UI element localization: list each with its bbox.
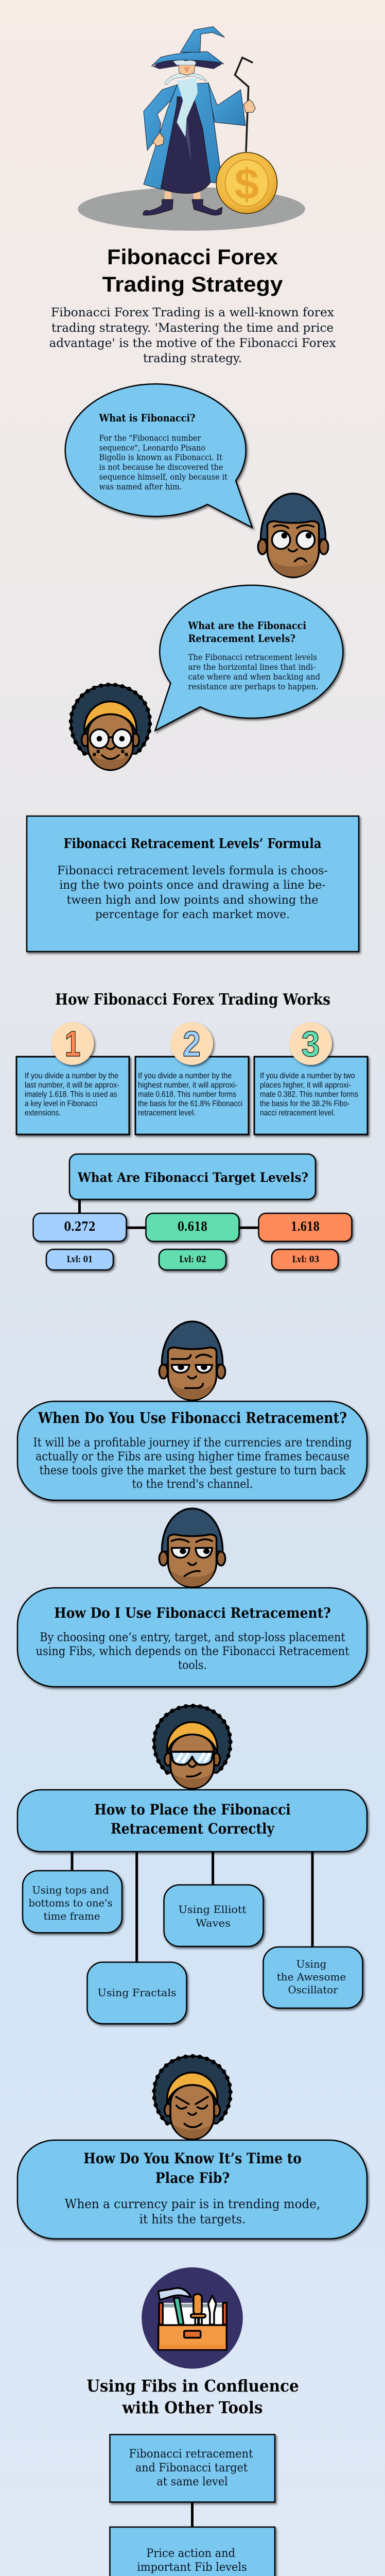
step 2 card: the basis for the 61.8% Fibonacci (138, 1099, 242, 1108)
speech bubble: retracement levels: The Fibonacci retracement levels (188, 653, 317, 662)
level value 0.618 (146, 1213, 239, 1242)
level value 1.618: 1.618 (291, 1219, 320, 1234)
option: tops and bottoms: Using tops and (32, 1884, 109, 1896)
level tag 02 (159, 1249, 226, 1270)
step 3 card: places higher, it will approxi- (260, 1081, 351, 1090)
step 1 card (16, 1022, 129, 1134)
option: Elliott waves: Using Elliott (179, 1903, 247, 1916)
option: tops and bottoms: time frame (43, 1910, 100, 1922)
panel: when to use retracement (18, 1401, 367, 1500)
panel: how to use retracement: using Fibs, which depends on the Fibonacci Retracement (36, 1645, 349, 1658)
step 2 card: 2 (183, 1024, 201, 1064)
flow box 1: and Fibonacci target (135, 2462, 248, 2475)
flow box 2: important Fib levels (137, 2561, 247, 2574)
level tag 01: Lvl: 01 (67, 1255, 93, 1265)
panel: how to use retracement (18, 1588, 367, 1687)
title: Fibonacci Forex (107, 245, 278, 269)
option: fractals: Using Fractals (98, 1986, 176, 1998)
speech bubble: what is Fibonacci: sequence", Leonardo Pisano (99, 443, 205, 452)
icon: man with raised eyebrow (159, 1321, 225, 1400)
panel: retracement levels formula: ing the two points once and drawing a line be- (59, 878, 326, 892)
step 3 card: If you divide a number by two (260, 1072, 355, 1080)
option: awesome oscillator: Oscillator (288, 1984, 338, 1996)
icon: woman with sunglasses (154, 1706, 231, 1789)
step 1 card: 1 (65, 1024, 80, 1064)
level tag 01 (46, 1249, 113, 1270)
step 3 card: mate 0.382. This number forms (260, 1090, 358, 1099)
target levels heading box: What Are Fibonacci Target Levels? (77, 1170, 308, 1185)
heading: confluence (86, 2376, 299, 2417)
target levels heading box (69, 1154, 316, 1199)
step 3 card (254, 1022, 367, 1134)
panel: when to place Fib: Place Fib? (155, 2170, 230, 2187)
heading: confluence: Using Fibs in Confluence (86, 2376, 299, 2396)
panel: when to place Fib: How Do You Know It’s Time to (83, 2150, 302, 2167)
flow box 1: Fibonacci retracement (129, 2448, 253, 2461)
step 1 card: extensions. (25, 1109, 61, 1117)
step 1 card: If you divide a number by the (25, 1072, 118, 1080)
intro text: Fibonacci Forex Trading is a well-known forex (51, 306, 334, 319)
step 2 card: highest number, it will approxi- (138, 1081, 237, 1090)
step 2 card: retracement level. (138, 1109, 196, 1117)
panel: when to use retracement: to the trend's channel. (132, 1478, 253, 1491)
illustration: wizard with coin (78, 27, 305, 231)
icon: woman with round glasses (71, 685, 150, 770)
panel: retracement levels formula: Fibonacci Retracement Levels’ Formula (64, 836, 322, 852)
option: tops and bottoms (23, 1871, 122, 1933)
panel: when to place Fib: it hits the targets. (139, 2212, 246, 2227)
title (102, 245, 283, 296)
level value 0.272: 0.272 (64, 1219, 96, 1234)
panel: how to use retracement: By choosing one’s entry, target, and stop-loss placement (40, 1631, 345, 1645)
speech bubble: retracement levels: cate where and when backing and (188, 672, 320, 682)
level value 1.618 (258, 1213, 352, 1242)
intro text: trading strategy. 'Mastering the time and price (51, 321, 334, 335)
heading box: place the retracement: Retracement Correctly (111, 1820, 275, 1837)
option: awesome oscillator: the Awesome (277, 1971, 346, 1983)
heading box: place the retracement (18, 1790, 367, 1852)
option: fractals (87, 1962, 186, 2024)
speech bubble: what is Fibonacci: What is Fibonacci? (99, 412, 196, 424)
step 1 card: a key level in Fibonacci (25, 1099, 97, 1108)
panel: how to use retracement: tools. (178, 1659, 207, 1672)
level tag 03 (272, 1249, 338, 1270)
panel: when to use retracement: these tools give the market the best gesture to turn back (39, 1464, 346, 1478)
panel: retracement levels formula: percentage for each market move. (95, 908, 290, 921)
level tag 03: Lvl: 03 (292, 1255, 319, 1265)
intro text (49, 306, 336, 365)
icon: man looking up (258, 494, 328, 578)
panel: retracement levels formula: Fibonacci retracement levels formula is choos- (57, 864, 328, 877)
panel: how to place retracement (18, 1790, 367, 2024)
speech bubble: what is Fibonacci: was named after him. (99, 482, 182, 492)
option: awesome oscillator: Using (296, 1958, 327, 1970)
panel: how to use retracement: How Do I Use Fibonacci Retracement? (54, 1605, 331, 1621)
speech bubble: what is Fibonacci: sequence himself, only because it (99, 472, 228, 482)
option: awesome oscillator (264, 1947, 362, 2008)
level value 0.618: 0.618 (178, 1219, 207, 1234)
option: Elliott waves: Waves (196, 1917, 231, 1929)
level value 0.272 (33, 1213, 127, 1242)
step 1 card: imately 1.618. This is used as (25, 1090, 117, 1099)
speech bubble: what is Fibonacci: For the "Fibonacci number (99, 434, 201, 443)
panel: when to use retracement: actually or the Fibs are using higher time frames because (36, 1450, 349, 1463)
level tag 02: Lvl: 02 (179, 1255, 206, 1265)
flow box 1: at same level (156, 2476, 228, 2488)
flow box 2 (110, 2527, 275, 2576)
step 2 card (135, 1022, 249, 1134)
icon: skeptical man (159, 1509, 225, 1587)
speech bubble: what is Fibonacci: Bigollo is known as Fibonacci. It (99, 453, 223, 462)
illustration: wizard with coin: $ (235, 160, 259, 208)
panel: when to place Fib: When a currency pair is in trending mode, (65, 2197, 320, 2211)
step 2 card: mate 0.618. This number forms (138, 1090, 236, 1099)
intro text: trading strategy. (143, 352, 242, 365)
flow chart: confluence tools (110, 2435, 275, 2576)
option: tops and bottoms: bottoms to one's (29, 1897, 112, 1909)
intro text: advantage' is the motive of the Fibonacci Forex (49, 337, 336, 350)
step 3 card: 3 (302, 1024, 320, 1064)
step 3 card: nacci retracement level. (260, 1109, 335, 1117)
panel: retracement levels formula (27, 816, 359, 952)
speech bubble: what is Fibonacci (65, 384, 252, 528)
flow box 1 (110, 2435, 275, 2502)
speech bubble: retracement levels: Retracement Levels? (188, 632, 295, 645)
option: Elliott waves (164, 1885, 264, 1946)
heading: confluence: with Other Tools (122, 2398, 262, 2417)
heading box: place the retracement: How to Place the Fibonacci (94, 1801, 291, 1818)
heading: how it works: How Fibonacci Forex Trading Works (55, 991, 330, 1009)
step 1 card: last number, it will be approx- (25, 1081, 119, 1090)
panel: when to use retracement: When Do You Use Fibonacci Retracement? (38, 1409, 347, 1427)
flow box 2: Price action and (146, 2547, 235, 2560)
speech bubble: retracement levels: What are the Fibonacci (188, 619, 306, 632)
panel: retracement levels formula: tween high and low points and showing the (67, 893, 318, 907)
panel: when to use retracement: It will be a profitable journey if the currencies are trending (33, 1436, 352, 1450)
speech bubble: retracement levels: resistance are perhaps to happen. (188, 682, 318, 691)
icon: woman with eyes closed (154, 2056, 231, 2140)
step 2 card: If you divide a number by the (138, 1072, 232, 1080)
speech bubble: retracement levels: are the horizontal lines that indi- (188, 663, 316, 672)
speech bubble: retracement levels (155, 585, 343, 731)
target levels diagram (33, 1154, 352, 1270)
title: Trading Strategy (102, 272, 283, 296)
panel: when to place Fib (18, 2140, 367, 2239)
icon: toolbox (142, 2267, 243, 2369)
speech bubble: what is Fibonacci: is not because he discovered the (99, 463, 223, 472)
step 3 card: the basis for the 38.2% Fibo- (260, 1099, 350, 1108)
